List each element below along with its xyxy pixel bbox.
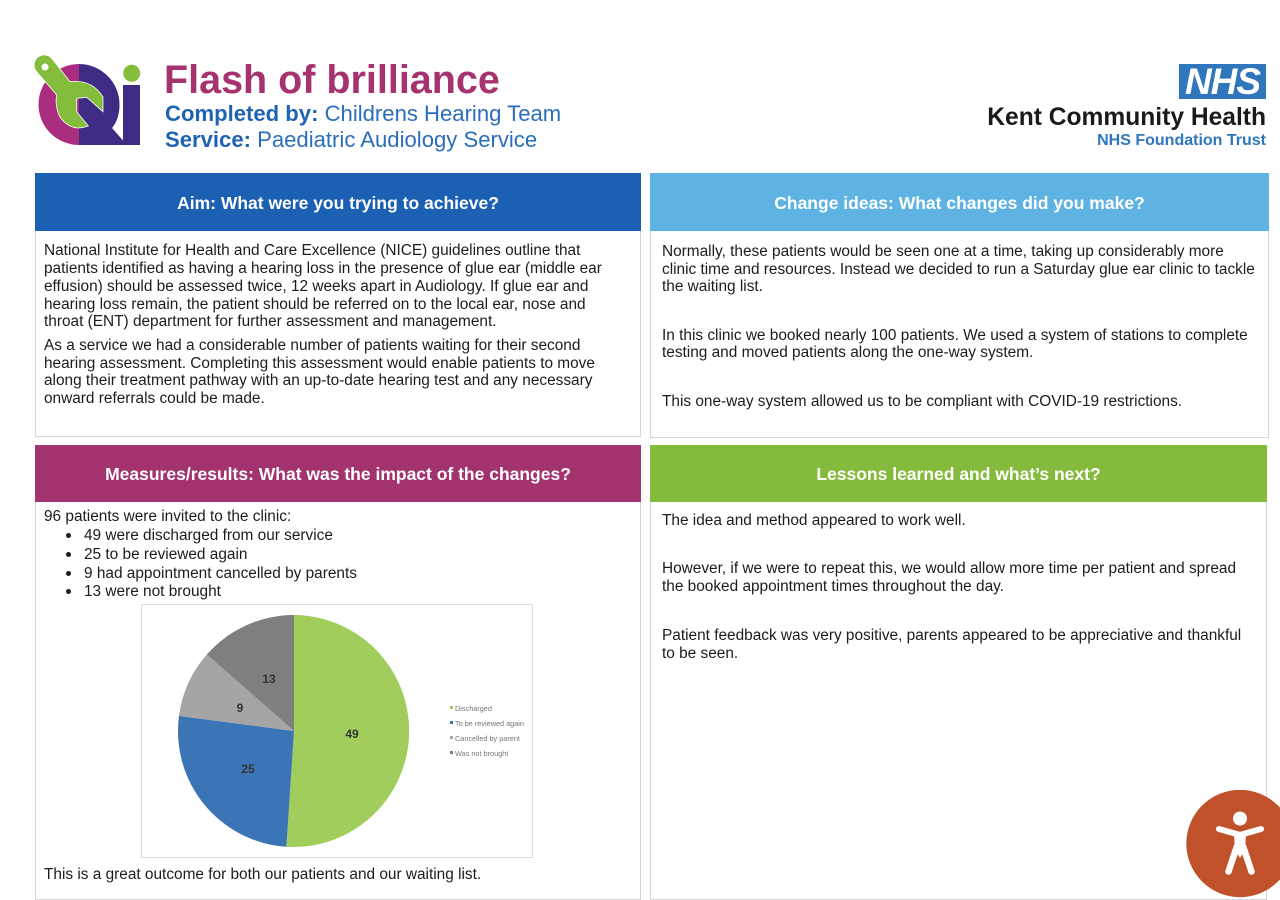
slice: discharged	[286, 615, 409, 847]
aim heading	[35, 173, 641, 231]
change ideas heading: Change ideas: What changes did you make?	[774, 193, 1145, 213]
change ideas text: testing and moved patients along the one-way system.	[662, 344, 1033, 361]
aim text: patients identified as having a hearing loss in the presence of glue ear (middle ear	[44, 260, 602, 277]
lessons text: to be seen.	[662, 645, 738, 662]
aim text: National Institute for Health and Care Excellence (NICE) guidelines outline that	[44, 242, 580, 259]
change ideas text	[662, 243, 1255, 410]
panel: measures and results	[35, 445, 641, 900]
results text: 25 to be reviewed again	[84, 546, 247, 563]
results text: 96 patients were invited to the clinic:	[44, 508, 291, 525]
results text: 49 were discharged from our service	[84, 527, 333, 544]
change ideas text: In this clinic we booked nearly 100 patients. We used a system of stations to complete	[662, 327, 1248, 344]
slice: was not brought	[207, 615, 294, 731]
pie legend	[450, 704, 524, 758]
aim text: hearing loss remain, the patient should be referred on to the local ear, nose and	[44, 296, 586, 313]
lessons text: The idea and method appeared to work well.	[662, 512, 966, 529]
results text: 13 were not brought	[84, 583, 221, 600]
title: Flash of brilliance	[164, 58, 500, 102]
service: Service: Paediatric Audiology Service	[165, 127, 537, 152]
lessons text: Patient feedback was very positive, parents appeared to be appreciative and thankful	[662, 627, 1241, 644]
pie legend: To be reviewed again	[455, 719, 524, 728]
pie value labels: 9	[237, 701, 244, 715]
change ideas heading	[650, 173, 1269, 231]
foundation trust: NHS Foundation Trust	[1097, 132, 1266, 149]
lessons heading	[650, 445, 1267, 502]
lessons text: the booked appointment times throughout the day.	[662, 578, 1004, 595]
QI logo	[34, 55, 140, 145]
aim text: along their treatment pathway with an up-to-date hearing test and any necessary	[44, 372, 592, 389]
change ideas text: the waiting list.	[662, 278, 763, 295]
pie value labels: 25	[241, 762, 255, 776]
aim text	[44, 242, 602, 407]
change ideas text: This one-way system allowed us to be compliant with COVID-19 restrictions.	[662, 393, 1182, 410]
pie value labels: 13	[262, 672, 276, 686]
panel: lessons learned	[650, 445, 1267, 900]
organisation name: Kent Community Health	[987, 104, 1266, 131]
slice: to be reviewed again	[178, 716, 294, 847]
panel: change ideas	[650, 173, 1269, 438]
panel: aim	[35, 173, 641, 437]
measures heading	[35, 445, 641, 502]
change ideas text: clinic time and resources. Instead we decided to run a Saturday glue ear clinic to tackle	[662, 261, 1255, 278]
aim heading: Aim: What were you trying to achieve?	[177, 193, 499, 213]
pie chart	[141, 604, 533, 858]
results text	[44, 508, 357, 600]
slice: cancelled by parent	[179, 654, 294, 731]
aim text: throat (ENT) department for further assessment and management.	[44, 313, 497, 330]
lessons text	[662, 512, 1241, 662]
change ideas text: Normally, these patients would be seen one at a time, taking up considerably more	[662, 243, 1224, 260]
pie legend: Was not brought	[455, 749, 508, 758]
aim text: onward referrals could be made.	[44, 390, 265, 407]
measures heading: Measures/results: What was the impact of the changes?	[105, 464, 571, 484]
pie legend: Cancelled by parent	[455, 734, 520, 743]
aim text: As a service we had a considerable number of patients waiting for their second	[44, 337, 580, 354]
aim text: effusion) should be assessed twice, 12 weeks apart in Audiology. If glue ear and	[44, 278, 588, 295]
pie value labels: 49	[345, 727, 359, 741]
icon: accessibility button	[1186, 790, 1280, 898]
pie legend: Discharged	[455, 704, 492, 713]
closing statement: This is a great outcome for both our patients and our waiting list.	[44, 866, 481, 883]
completed by: Completed by: Childrens Hearing Team	[165, 101, 561, 126]
lessons text: However, if we were to repeat this, we would allow more time per patient and spread	[662, 560, 1236, 577]
results text: 9 had appointment cancelled by parents	[84, 565, 357, 582]
aim text: hearing assessment. Completing this assessment would enable patients to move	[44, 355, 595, 372]
lessons heading: Lessons learned and what’s next?	[816, 464, 1101, 484]
pie value labels	[237, 672, 359, 776]
